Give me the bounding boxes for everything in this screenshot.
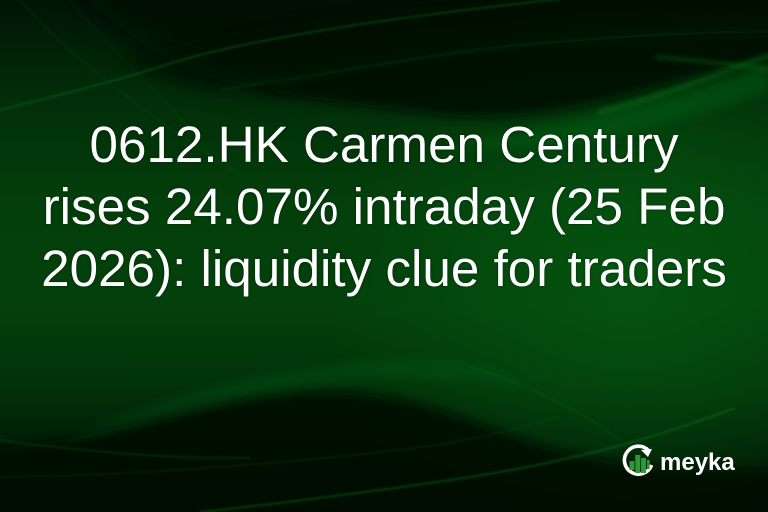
title: 2026): liquidity clue for traders bbox=[41, 240, 727, 297]
wordmark: meyka bbox=[660, 449, 735, 476]
icon: ring with bars bbox=[624, 446, 652, 474]
title: rises 24.07% intraday (25 Feb bbox=[43, 178, 725, 235]
logo: meyka bbox=[622, 444, 735, 476]
title: 0612.HK Carmen Century bbox=[90, 116, 678, 173]
title bbox=[41, 116, 727, 297]
